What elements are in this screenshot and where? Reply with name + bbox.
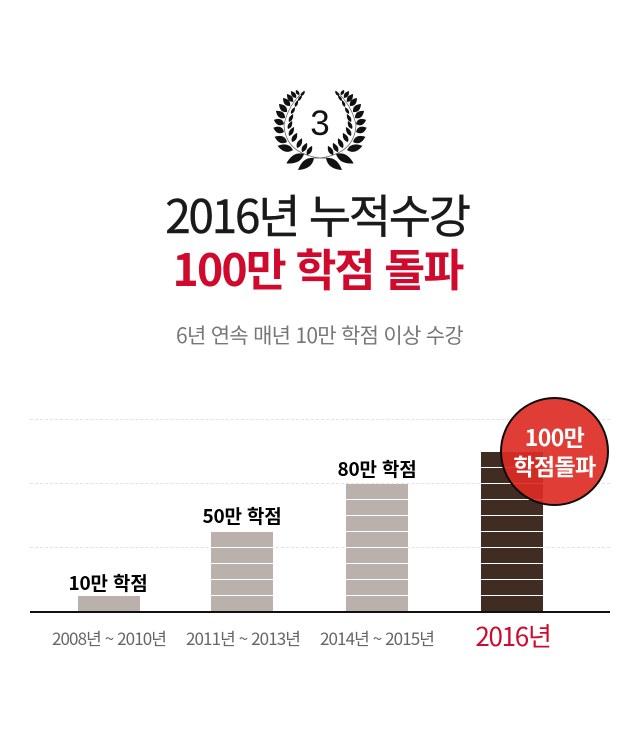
bar chart xyxy=(30,419,610,654)
bar label: 50만 학점: 50만 학점 xyxy=(202,502,281,529)
subtitle: 6년 연속 매년 10만 학점 이상 수강 xyxy=(176,320,463,350)
year label: 2016: 2016년 xyxy=(475,617,551,654)
callout badge: 100만 학점돌파: 100만 xyxy=(525,419,584,453)
bar: 2008-2010 xyxy=(78,596,140,612)
callout badge: 100만 학점돌파: 학점돌파 xyxy=(513,448,596,482)
title line 2: 100만 학점 돌파 xyxy=(173,234,462,299)
bar: 2011-2013 xyxy=(211,532,273,612)
year label: 2008-2010: 2008년 ~ 2010년 xyxy=(52,625,166,650)
title line 1: 2016년 누적수강 xyxy=(165,181,469,247)
bar: 2014-2015 xyxy=(346,484,408,612)
year label: 2014-2015: 2014년 ~ 2015년 xyxy=(320,625,434,650)
icon: laurel wreath with number 3: 3 xyxy=(310,104,330,143)
bar: 2016 xyxy=(481,452,543,612)
year label: 2011-2013: 2011년 ~ 2013년 xyxy=(186,625,300,650)
callout badge: 100만 학점돌파 xyxy=(500,397,609,506)
icon: laurel wreath with number 3 xyxy=(273,90,367,170)
bar label: 80만 학점: 80만 학점 xyxy=(338,455,416,482)
axis line xyxy=(30,611,610,613)
bar label: 10만 학점: 10만 학점 xyxy=(68,569,147,596)
